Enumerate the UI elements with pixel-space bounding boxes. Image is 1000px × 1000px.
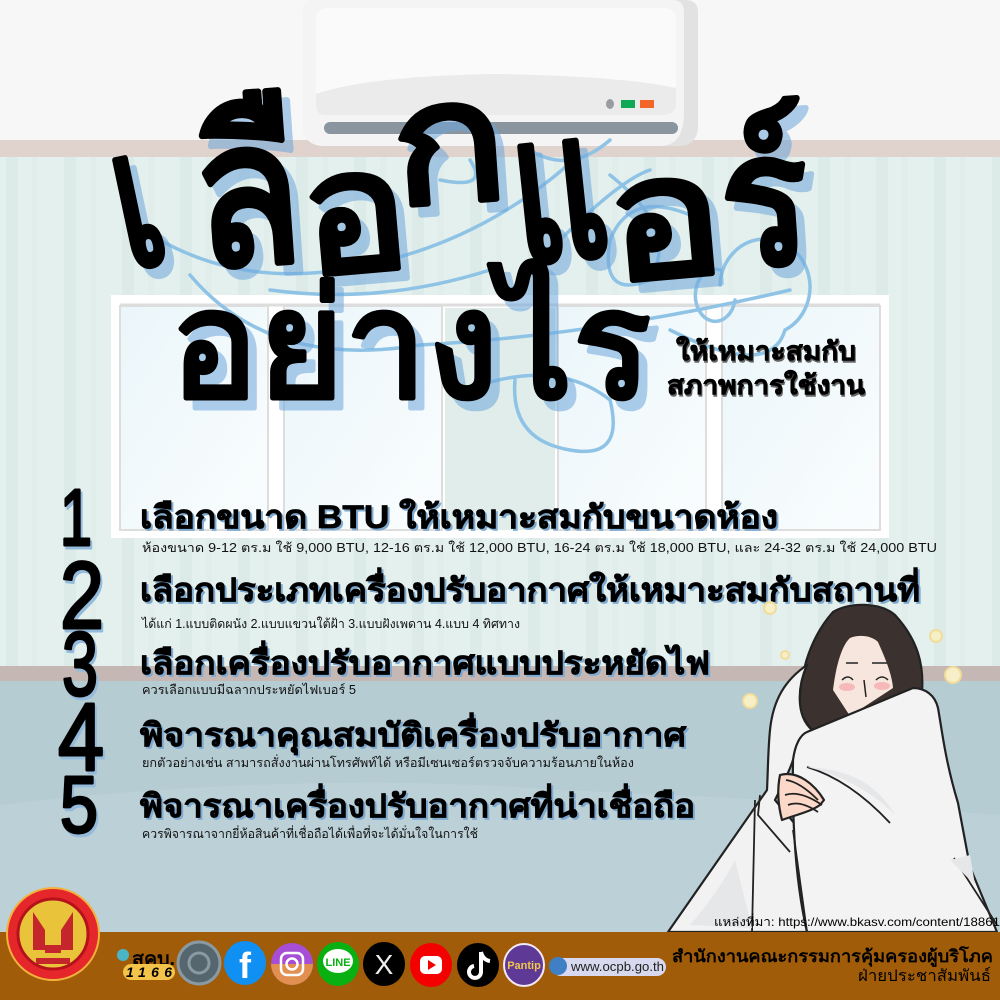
subtitle: ให้เหมาะสมกับ: [676, 336, 856, 366]
item 3: [140, 640, 710, 697]
item 4: พิจารณาคุณสมบัติเครื่องปรับอากาศ: [140, 712, 687, 756]
icon: instagram: [271, 943, 313, 985]
subtitle: [667, 336, 865, 400]
icon: x: X: [375, 949, 394, 980]
agency seal: [7, 888, 99, 980]
item 1: [140, 498, 937, 555]
hotline logo: 1166: [126, 964, 172, 980]
window: [111, 295, 889, 538]
title line 1: [89, 42, 817, 319]
icon: x: [363, 942, 405, 986]
decorative flowers: [743, 602, 961, 708]
floor: [0, 681, 1000, 932]
icon: facebook: f: [239, 945, 252, 986]
subtitle: สภาพการใช้งาน: [667, 370, 865, 400]
icon: facebook: [224, 941, 266, 986]
icon: portal: [178, 942, 220, 984]
footer band: [0, 932, 1000, 1000]
item 2: ได้แก่ 1.แบบติดผนัง 2.แบบแขวนใต้ฝ้า 3.แบบฝังเพดาน 4.แบบ 4 ทิศทาง: [141, 617, 520, 631]
website pill: [549, 957, 666, 976]
hotline logo: สคบ.: [132, 949, 175, 970]
title line 1: แ: [498, 68, 619, 308]
air conditioner: [303, 0, 698, 146]
title line 1: ร์: [712, 93, 817, 308]
title line 1: เ: [89, 88, 182, 311]
website pill: www.ocpb.go.th: [570, 959, 664, 974]
icon: pantip: Pantip: [507, 960, 541, 972]
agency name: สำนักงานคณะกรรมการคุ้มครองผู้บริโภค: [672, 946, 993, 968]
item 5: [140, 783, 695, 841]
item 3: ควรเลือกแบบมีฉลากประหยัดไฟเบอร์ 5: [142, 683, 356, 697]
icon: youtube: [410, 943, 452, 987]
item 4: [140, 712, 687, 770]
item 4: ยกตัวอย่างเช่น สามารถสั่งงานผ่านโทรศัพท์ได้ หรือมีเซนเซอร์ตรวจจับความร้อนภายในห้อง: [142, 754, 634, 770]
item 5: พิจารณาเครื่องปรับอากาศที่น่าเชื่อถือ: [140, 783, 695, 824]
skirting: [0, 666, 1000, 681]
item 1: ห้องขนาด 9-12 ตร.ม ใช้ 9,000 BTU, 12-16 ตร.ม ใช้ 12,000 BTU, 16-24 ตร.ม ใช้ 18,000 BTU, และ 24-32 ตร.ม ใช้ 24,000 BTU: [142, 541, 937, 555]
wind swirls: [160, 140, 810, 451]
icon: line: LINE: [325, 957, 351, 969]
icon: tiktok: [457, 943, 499, 987]
striped wall: [0, 157, 1000, 666]
title line 1: อ: [598, 117, 732, 319]
ceiling: [0, 0, 1000, 140]
item 2: เลือกประเภทเครื่องปรับอากาศให้เหมาะสมกับสถานที่: [140, 567, 920, 608]
hotline logo: [117, 949, 175, 980]
item 5: ควรพิจารณาจากยี่ห้อสินค้าที่เชื่อถือได้เพื่อที่จะได้มั่นใจในการใช้: [142, 825, 478, 841]
numbers: [58, 473, 104, 849]
numbers: 3: [62, 615, 98, 715]
title line 1: อ: [292, 112, 417, 313]
department name: ฝ่ายประชาสัมพันธ์: [858, 966, 991, 985]
title line 2: อย่างไร: [170, 259, 652, 431]
numbers: 4: [58, 684, 104, 791]
numbers: 5: [60, 760, 98, 849]
source credit: แหล่งที่มา: https://www.bkasv.com/content/18861: [714, 913, 1000, 929]
woman wrapped in blanket: [668, 605, 997, 932]
title line 1: ลื: [185, 77, 309, 312]
social icons: [178, 941, 666, 987]
item 3: เลือกเครื่องปรับอากาศแบบประหยัดไฟ: [140, 640, 710, 681]
numbers: 1: [60, 473, 92, 562]
item 1: เลือกขนาด BTU ให้เหมาะสมกับขนาดห้อง: [140, 498, 778, 535]
title line 1: ก: [384, 42, 514, 243]
floor highlight: [0, 783, 1000, 932]
icon: pantip: [504, 944, 544, 986]
numbers: 2: [60, 543, 104, 649]
wall molding: [0, 140, 1000, 157]
item 2: [140, 567, 920, 631]
icon: line: [317, 942, 359, 986]
